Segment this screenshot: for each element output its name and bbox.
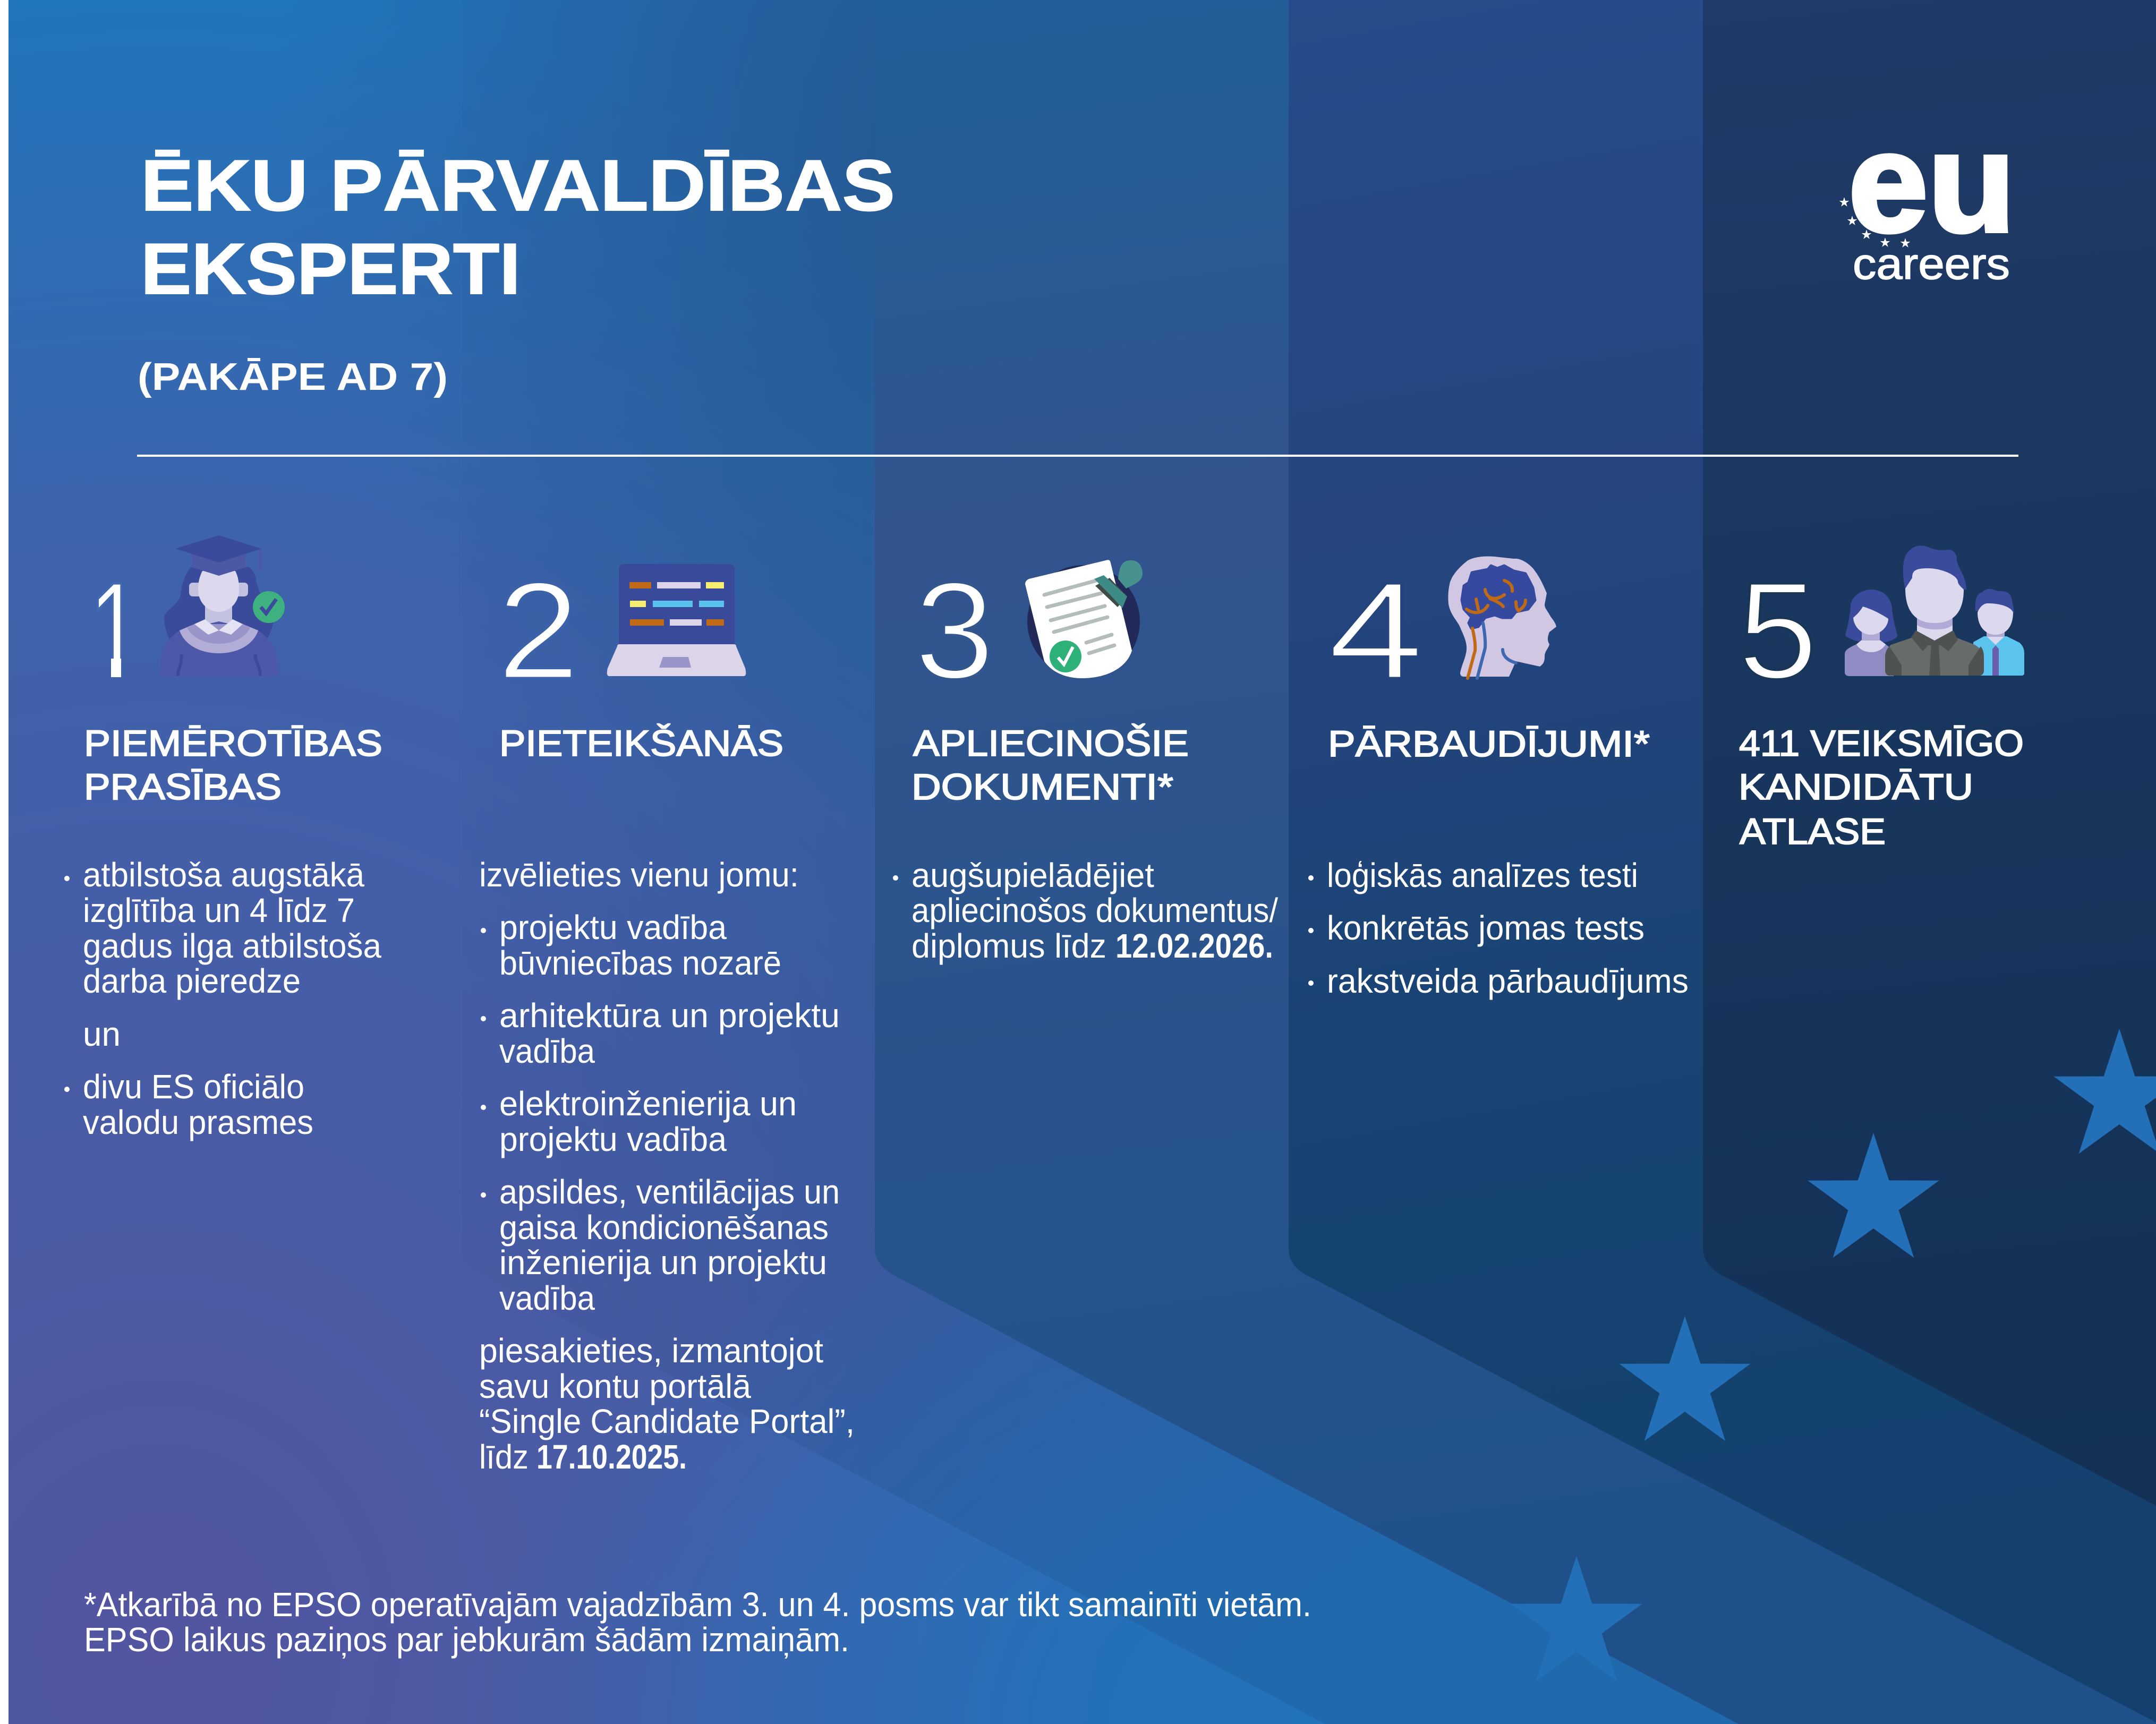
band: column 5 [1703, 0, 2156, 1506]
step body text [64, 856, 381, 1141]
title [141, 145, 895, 309]
step heading: PRASĪBAS [84, 766, 282, 807]
step body text: divu ES oficiālo [83, 1068, 304, 1106]
step body text: apsildes, ventilācijas un [499, 1173, 840, 1211]
title: ĒKU PĀRVALDĪBAS [141, 145, 895, 226]
panel: step 1 [64, 535, 382, 1141]
step body text: 12.02.2026. [1115, 927, 1273, 965]
step number 1 [99, 584, 122, 677]
step body text: valodu prasmes [83, 1103, 313, 1141]
icon: head with brain [1448, 556, 1556, 678]
step body text: savu kontu portālā [479, 1367, 751, 1405]
band: column 2 [462, 0, 2156, 1724]
panel: step 4 [1308, 554, 1689, 1000]
icon: graduate [160, 535, 285, 676]
step heading: PIEMĒROTĪBAS [84, 723, 382, 764]
panel: step 2 [479, 554, 855, 1476]
step body text: augšupielādējiet [911, 856, 1154, 894]
step body text: konkrētās jomas tests [1327, 909, 1644, 947]
icon: laptop [607, 564, 746, 676]
header divider [137, 455, 2018, 457]
step body text: piesakieties, izmantojot [479, 1332, 823, 1370]
step heading: ATLASE [1740, 811, 1886, 852]
step body text: izglītība un 4 līdz 7 [83, 891, 355, 929]
step body text [479, 856, 855, 1476]
logo: eu careers: careers [1853, 239, 2010, 288]
step body text: rakstveida pārbaudījums [1327, 962, 1689, 1000]
step heading [911, 723, 1189, 807]
step number 1: 1 [89, 554, 142, 708]
step body text [1308, 856, 1689, 1000]
decorative stars [1511, 1029, 2156, 1681]
panel: step 5 [1738, 545, 2024, 852]
step heading: APLIECINOŠIE [913, 723, 1189, 764]
step body text: inženierija un projektu [499, 1243, 827, 1282]
step body text: loģiskās analīzes testi [1327, 856, 1638, 894]
step heading: PĀRBAUDĪJUMI* [1328, 723, 1650, 764]
logo: eu careers: eu [1848, 104, 2015, 261]
step body text: vadība [499, 1032, 595, 1070]
panel: step 3 [893, 554, 1278, 965]
step body text: gadus ilga atbilstoša [83, 927, 381, 965]
step body text: elektroinženierija un [499, 1085, 797, 1123]
icon: group of people [1845, 545, 2024, 676]
subtitle: (PAKĀPE AD 7) [138, 356, 448, 398]
step body text [893, 856, 1278, 965]
band: column 3 [875, 0, 2156, 1724]
footnote [84, 1585, 1311, 1659]
step body text: būvniecības nozarē [499, 944, 781, 982]
step heading: KANDIDĀTU [1739, 766, 1973, 807]
step heading [1739, 723, 2024, 852]
step number 4: 4 [1328, 554, 1424, 708]
step heading: 411 VEIKSMĪGO [1739, 723, 2024, 764]
footnote: *Atkarībā no EPSO operatīvajām vajadzībām 3. un 4. posms var tikt samainīti vietām. [84, 1585, 1311, 1624]
step body text: līdz [479, 1438, 529, 1476]
step body text: gaisa kondicionēšanas [499, 1208, 829, 1247]
step body text: un [83, 1015, 121, 1053]
step body text: projektu vadība [499, 1120, 727, 1158]
step number 2: 2 [497, 554, 580, 708]
icon: document with stamp [1025, 560, 1143, 678]
footnote: EPSO laikus paziņos par jebkurām šādām izmaiņām. [84, 1620, 849, 1659]
title: EKSPERTI [141, 228, 521, 309]
step body text: arhitektūra un projektu [499, 996, 840, 1035]
step body text: projektu vadība [499, 908, 727, 946]
step body text: darba pieredze [83, 962, 301, 1000]
step heading: PIETEIKŠANĀS [499, 723, 783, 764]
step body text: “Single Candidate Portal”, [479, 1402, 855, 1440]
band: column 4 [1289, 0, 2156, 1722]
step body text: atbilstoša augstākā [83, 856, 364, 894]
step body text: apliecinošos dokumentus/ [911, 891, 1278, 929]
step heading [84, 723, 382, 807]
step heading: DOKUMENTI* [911, 766, 1173, 807]
step body text: 17.10.2025. [536, 1438, 687, 1476]
step body text: diplomus līdz [911, 927, 1106, 965]
step body text: izvēlieties vienu jomu: [479, 856, 799, 894]
step number 3: 3 [915, 554, 994, 708]
step body text: vadība [499, 1279, 595, 1317]
step number 5: 5 [1738, 554, 1818, 708]
